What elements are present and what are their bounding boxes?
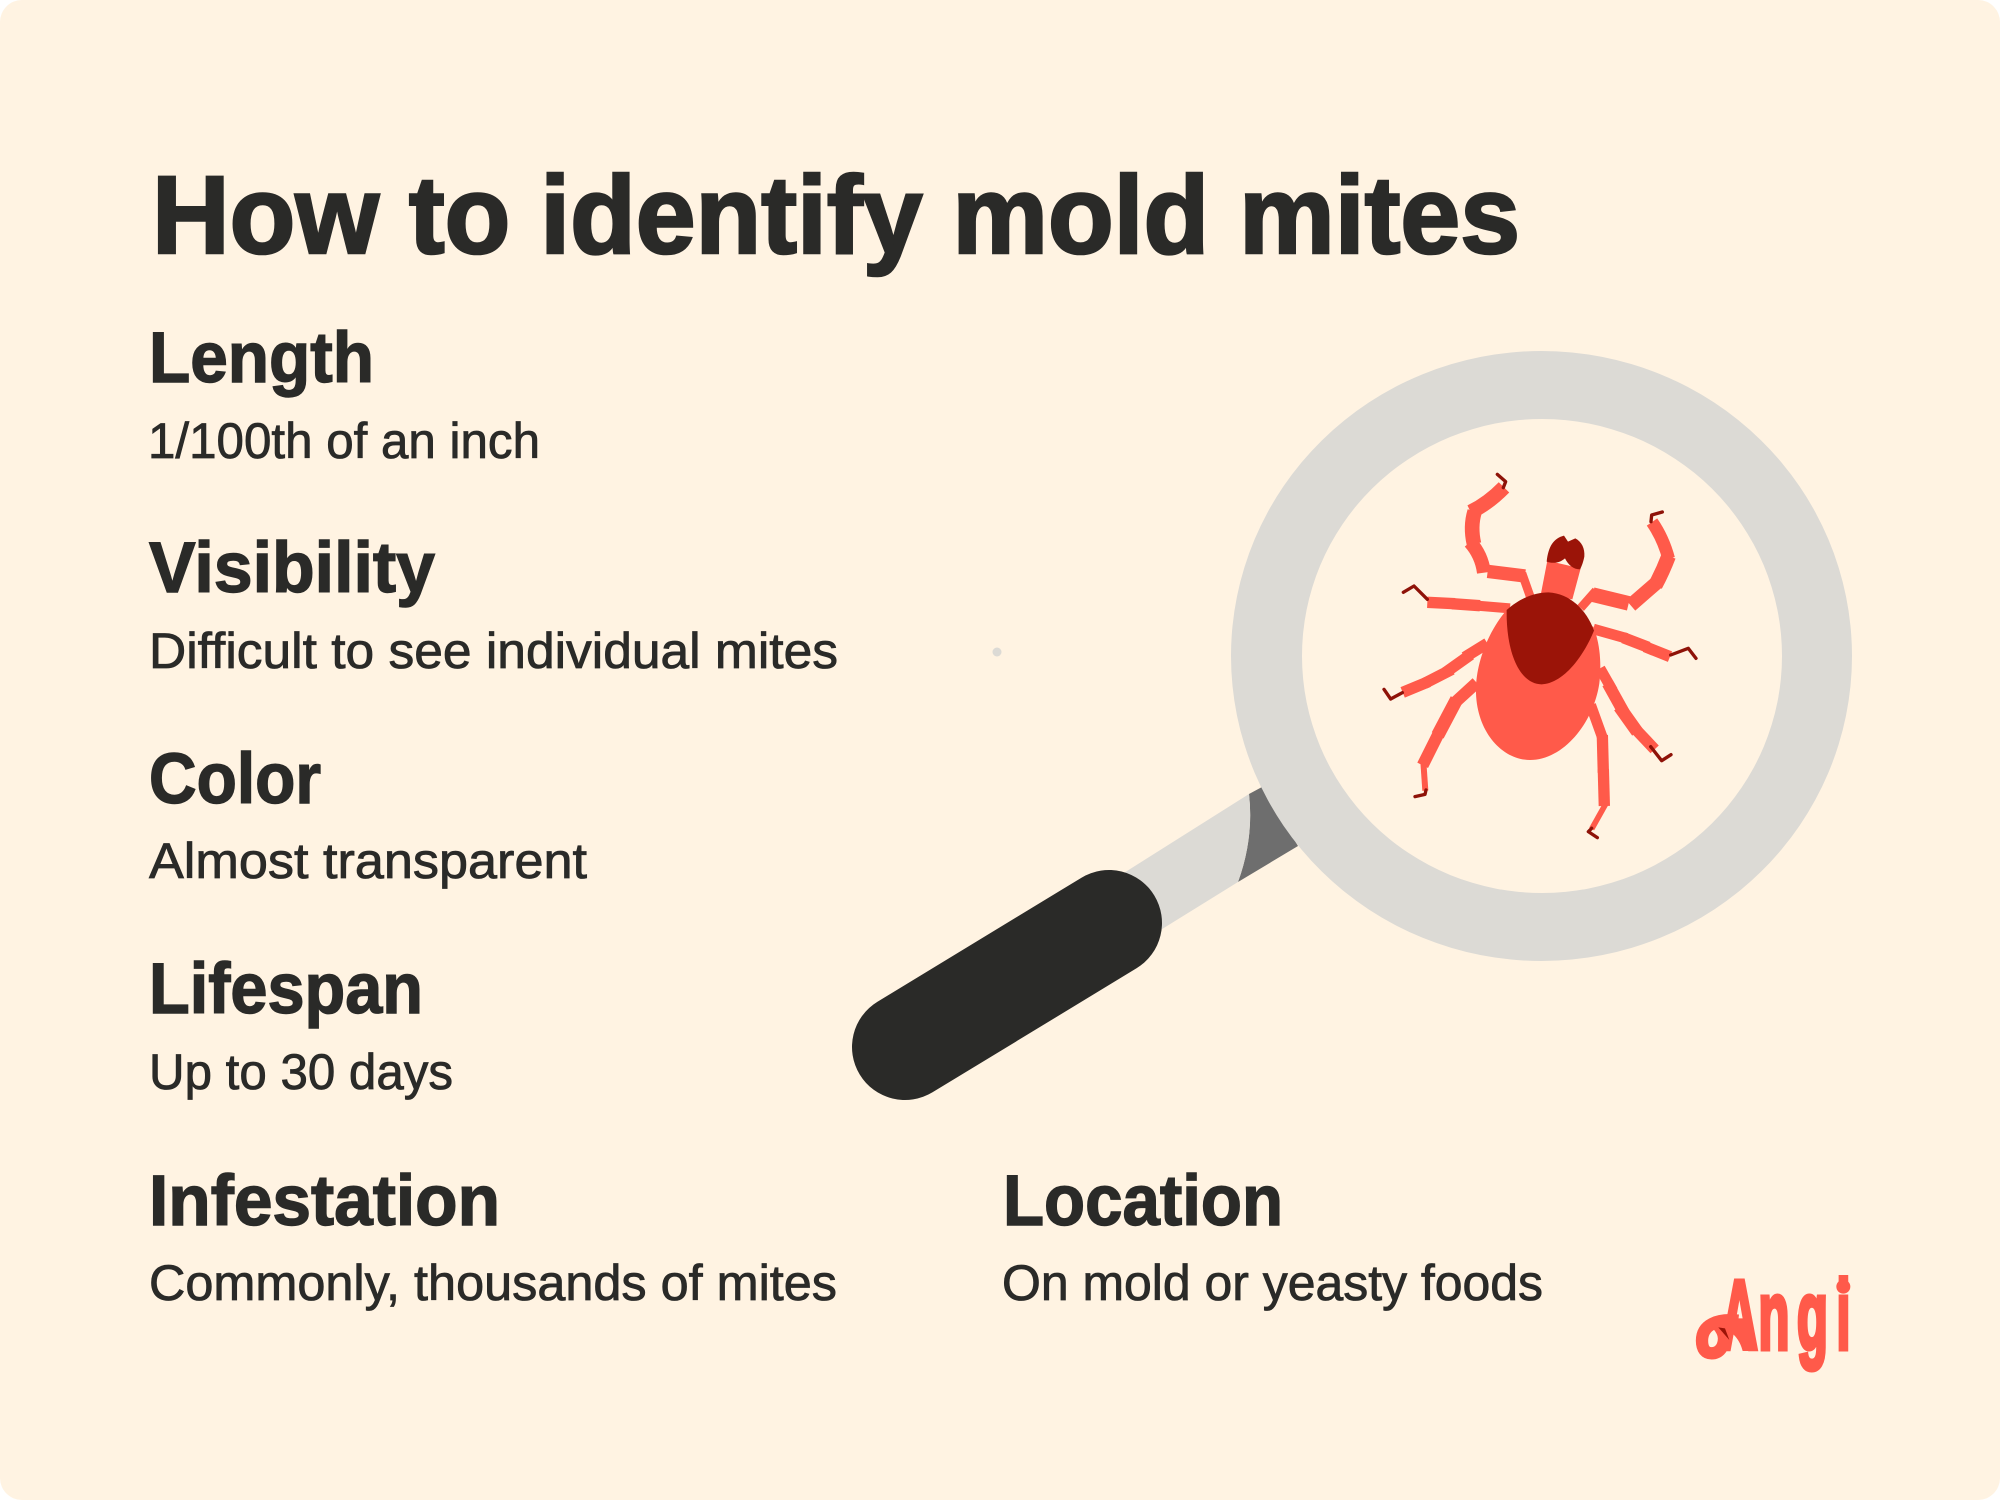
fact: visibility: Visibility [149,529,435,608]
mite legs [1403,487,1670,829]
fact: color: Almost transparent [149,833,587,889]
mite mouthparts [1547,536,1584,569]
handle shaft [1100,794,1250,949]
mite shield [1507,592,1594,684]
handle grip [905,923,1109,1047]
fact: visibility [149,529,838,679]
fact: lifespan: Up to 30 days [149,1044,453,1100]
fact: location: On mold or yeasty foods [1002,1255,1543,1311]
lens ring [1231,351,1852,961]
mite claws [1384,474,1696,838]
handle shadow [1238,787,1298,882]
fact: infestation [149,1162,837,1311]
logo loop [1702,1280,1850,1353]
fact: infestation: Commonly, thousands of mites [149,1255,837,1311]
fact: length: 1/100th of an inch [148,413,540,469]
fact: location: Location [1003,1162,1283,1241]
fact: infestation: Infestation [149,1162,500,1241]
fact: location [1002,1162,1543,1311]
icon: magnifying glass [905,351,1852,1047]
fact: length: Length [149,319,374,398]
mite head [1541,561,1581,599]
fact: lifespan: Lifespan [149,950,423,1029]
title: How to identify mold mites [152,154,1520,277]
mite abdomen [1476,610,1600,760]
fact: color [149,740,587,889]
fact: visibility: Difficult to see individual mites [149,623,838,679]
icon: mold mite [1384,474,1696,838]
fact: length [148,319,540,469]
fact: lifespan [149,950,453,1100]
fact: color: Color [149,740,321,819]
logo: Angi: Angi [1721,1260,1851,1370]
small dot [992,648,1002,656]
